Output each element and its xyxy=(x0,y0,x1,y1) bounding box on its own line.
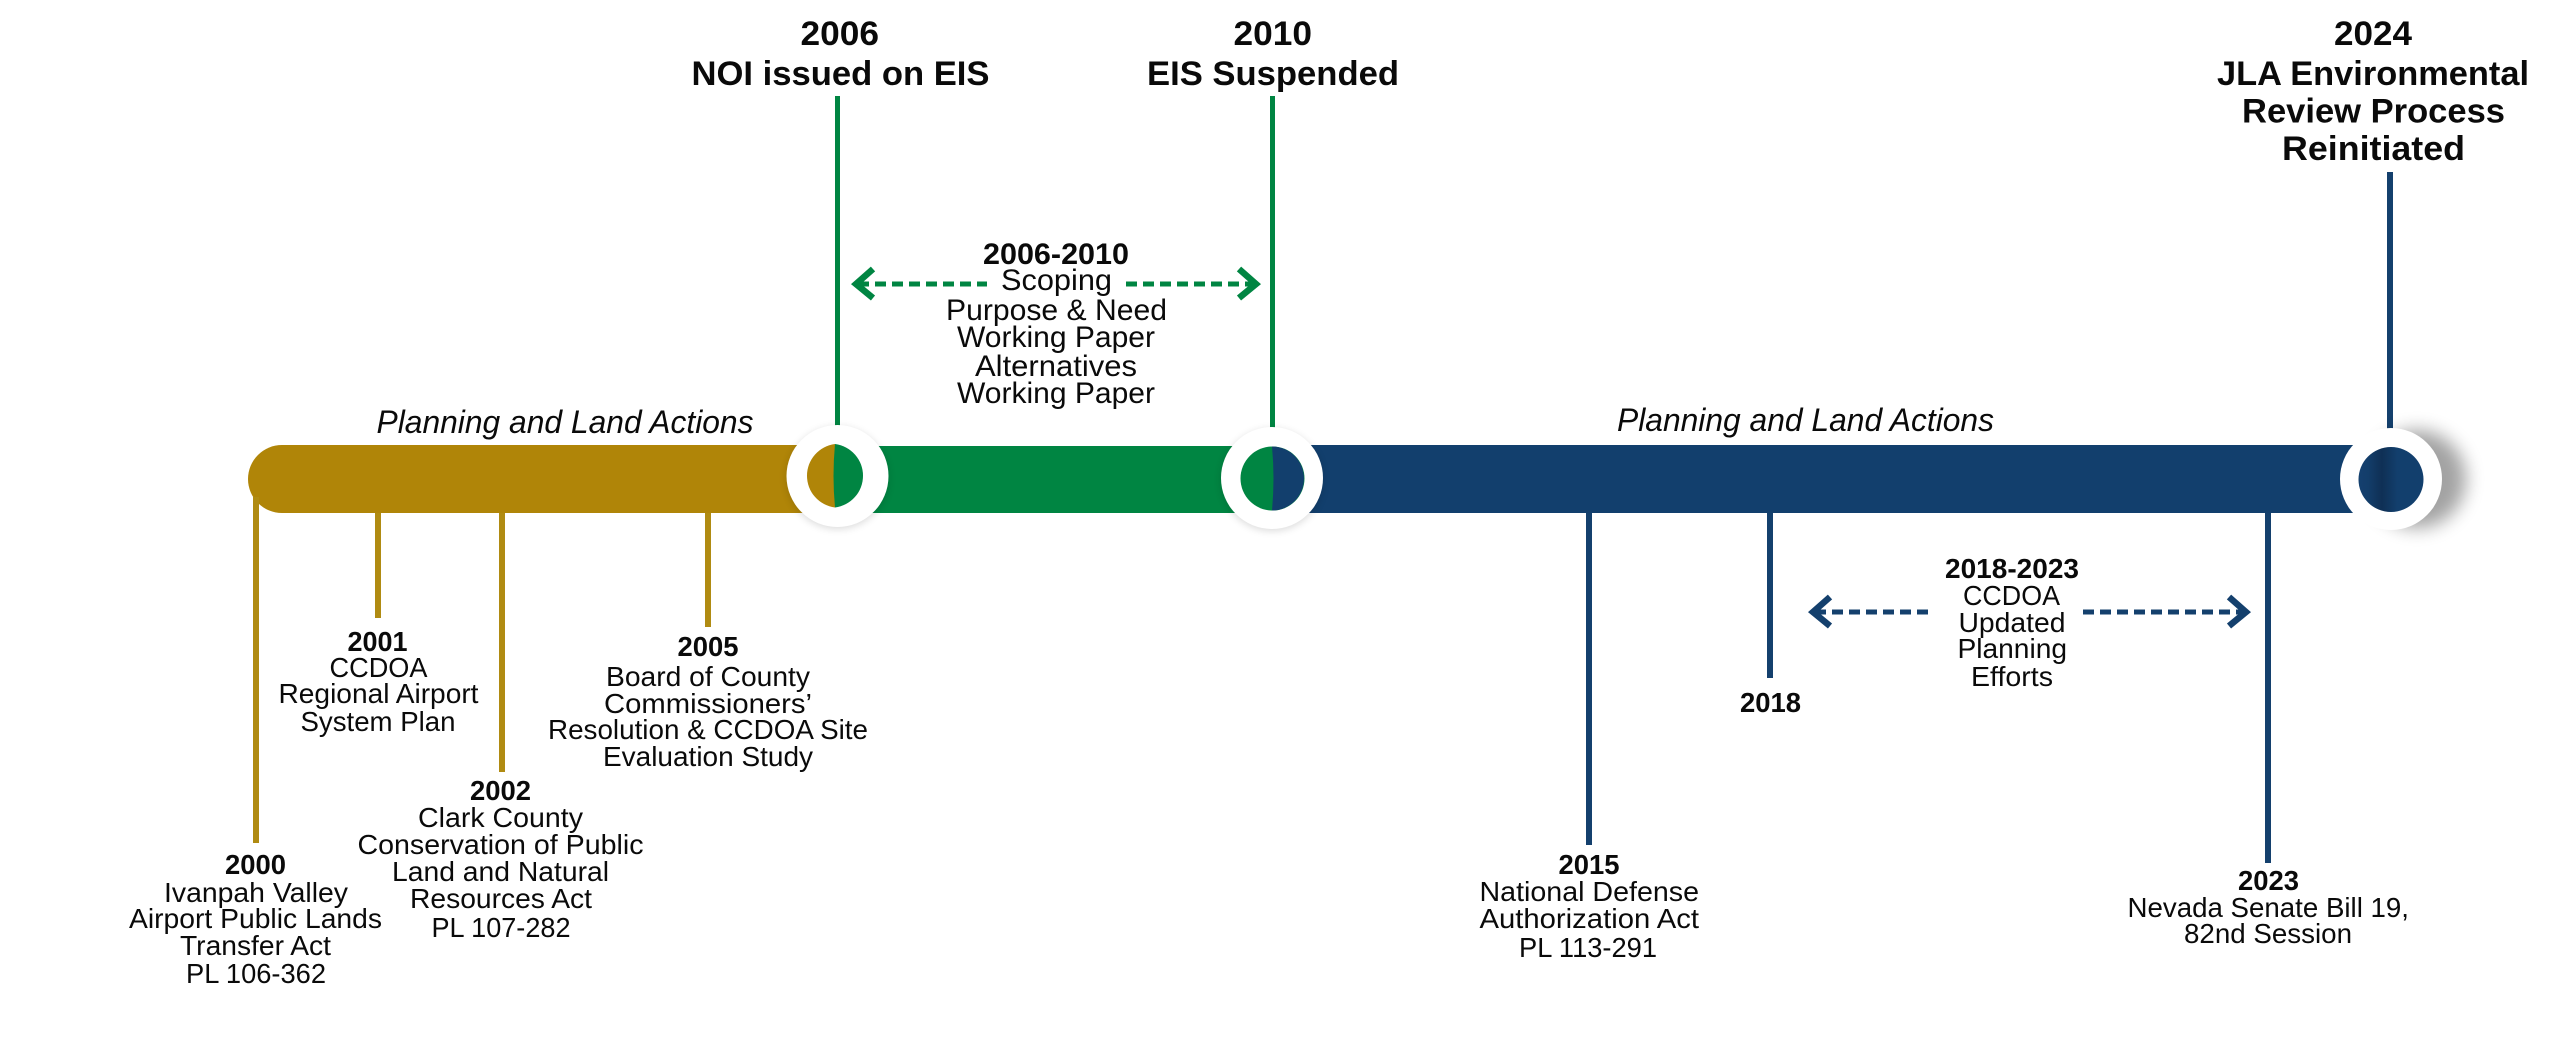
gold bar: planning and land actions 2000-2006 xyxy=(248,445,840,513)
text block 2006-2010 scoping: Alternatives xyxy=(975,350,1137,383)
text block 2002 xyxy=(358,775,644,943)
green stem 2010 xyxy=(1270,96,1275,428)
text block 2015: National Defense xyxy=(1480,876,1699,907)
text block 2005: Evaluation Study xyxy=(603,741,813,772)
heading 2006 NOI issued on EIS: 2006 xyxy=(800,15,879,53)
text block 2018-2023 CCDOA updated planning efforts xyxy=(1945,553,2079,692)
text block 2023: 82nd Session xyxy=(2184,918,2352,949)
text block 2002: Clark County xyxy=(418,802,583,833)
text block 2002: Land and Natural xyxy=(392,856,609,887)
text block 2023: Nevada Senate Bill 19, xyxy=(2128,892,2409,923)
text block 2006-2010 scoping: Working Paper xyxy=(957,377,1155,410)
text block 2015: PL 113-291 xyxy=(1519,932,1657,963)
text block 2001: 2001 xyxy=(348,626,408,657)
heading 2010 EIS Suspended xyxy=(1147,15,1399,93)
text block 2018: 2018 xyxy=(1740,687,1801,718)
text block 2000: PL 106-362 xyxy=(186,958,326,989)
text block 2001: System Plan xyxy=(300,706,456,737)
text block 2018-2023 CCDOA updated planning efforts: Planning xyxy=(1958,633,2067,664)
heading 2024 JLA Environmental Review Process Reinitiated: JLA Environmental xyxy=(2217,55,2529,93)
heading 2024 JLA Environmental Review Process Reinitiated: 2024 xyxy=(2334,15,2412,53)
text block 2006-2010 scoping: Purpose & Need xyxy=(946,294,1167,327)
heading 2006 NOI issued on EIS xyxy=(692,15,990,93)
text block 2018-2023 CCDOA updated planning efforts: CCDOA xyxy=(1963,580,2060,611)
text block 2005 xyxy=(548,631,868,772)
text block 2018-2023 CCDOA updated planning efforts: Updated xyxy=(1958,607,2066,638)
label: planning and land actions (gold): Planning and Land Actions xyxy=(376,404,754,440)
navy stem 2024 xyxy=(2387,172,2393,430)
heading 2024 JLA Environmental Review Process Reinitiated xyxy=(2217,15,2529,168)
text block 2000: Airport Public Lands xyxy=(129,903,382,934)
text block 2015 xyxy=(1480,849,1699,963)
text block 2002: 2002 xyxy=(470,775,531,806)
heading 2010 EIS Suspended: 2010 xyxy=(1234,15,1312,53)
navy stem 2018 xyxy=(1767,513,1773,678)
green dashed double arrow 2006-2010 xyxy=(856,269,1256,298)
text block 2001: Regional Airport xyxy=(278,678,479,709)
navy stem 2023 xyxy=(2265,513,2271,863)
green bar: 2006-2010 xyxy=(838,446,1274,513)
text block 2000: Ivanpah Valley xyxy=(164,877,348,908)
text block 2001: CCDOA xyxy=(330,652,428,683)
text block 2015: 2015 xyxy=(1558,849,1620,880)
text block 2000 xyxy=(129,849,382,989)
heading 2010 EIS Suspended: EIS Suspended xyxy=(1147,55,1399,93)
label: planning and land actions (navy): Planning and Land Actions xyxy=(1617,402,1994,438)
navy dashed double arrow 2018-2023 xyxy=(1813,597,2246,626)
node 2010: green to navy xyxy=(1221,427,1323,531)
text block 2006-2010 scoping: Working Paper xyxy=(957,321,1155,354)
text block 2005: Board of County xyxy=(606,661,810,692)
text block 2023: 2023 xyxy=(2238,865,2299,896)
gold stem 2000 xyxy=(253,497,259,843)
text block 2006-2010 scoping: Scoping xyxy=(1001,264,1112,297)
node 2006: gold to green xyxy=(786,425,888,529)
text block 2005: Resolution & CCDOA Site xyxy=(548,714,868,745)
text block 2002: PL 107-282 xyxy=(432,912,570,943)
heading 2006 NOI issued on EIS: NOI issued on EIS xyxy=(692,55,990,93)
navy stem 2015 xyxy=(1586,513,1592,845)
text block 2018-2023 CCDOA updated planning efforts: Efforts xyxy=(1971,661,2053,692)
node 2024: navy end cap with shadow xyxy=(2340,428,2466,530)
text block 2000: 2000 xyxy=(225,849,286,880)
text block 2005: 2005 xyxy=(678,631,738,662)
heading 2024 JLA Environmental Review Process Reinitiated: Reinitiated xyxy=(2282,130,2465,168)
text block 2018-2023 CCDOA updated planning efforts: 2018-2023 xyxy=(1945,553,2079,584)
gold stem 2005 xyxy=(705,513,711,627)
text block 2000: Transfer Act xyxy=(180,930,331,961)
text block 2002: Resources Act xyxy=(410,883,592,914)
text block 2015: Authorization Act xyxy=(1480,903,1699,934)
text block 2006-2010 scoping: 2006-2010 xyxy=(983,238,1129,271)
heading 2024 JLA Environmental Review Process Reinitiated: Review Process xyxy=(2242,92,2505,130)
navy bar: planning and land actions 2010-2024 xyxy=(1272,445,2392,513)
text block 2006-2010 scoping xyxy=(946,238,1167,410)
gold stem 2001 xyxy=(375,513,381,618)
gold stem 2002 xyxy=(499,513,505,772)
text block 2002: Conservation of Public xyxy=(358,829,644,860)
text block 2001 xyxy=(278,626,479,737)
text block 2005: Commissioners’ xyxy=(604,688,812,719)
text block 2023 xyxy=(2128,865,2409,949)
green stem 2006 xyxy=(835,96,840,426)
